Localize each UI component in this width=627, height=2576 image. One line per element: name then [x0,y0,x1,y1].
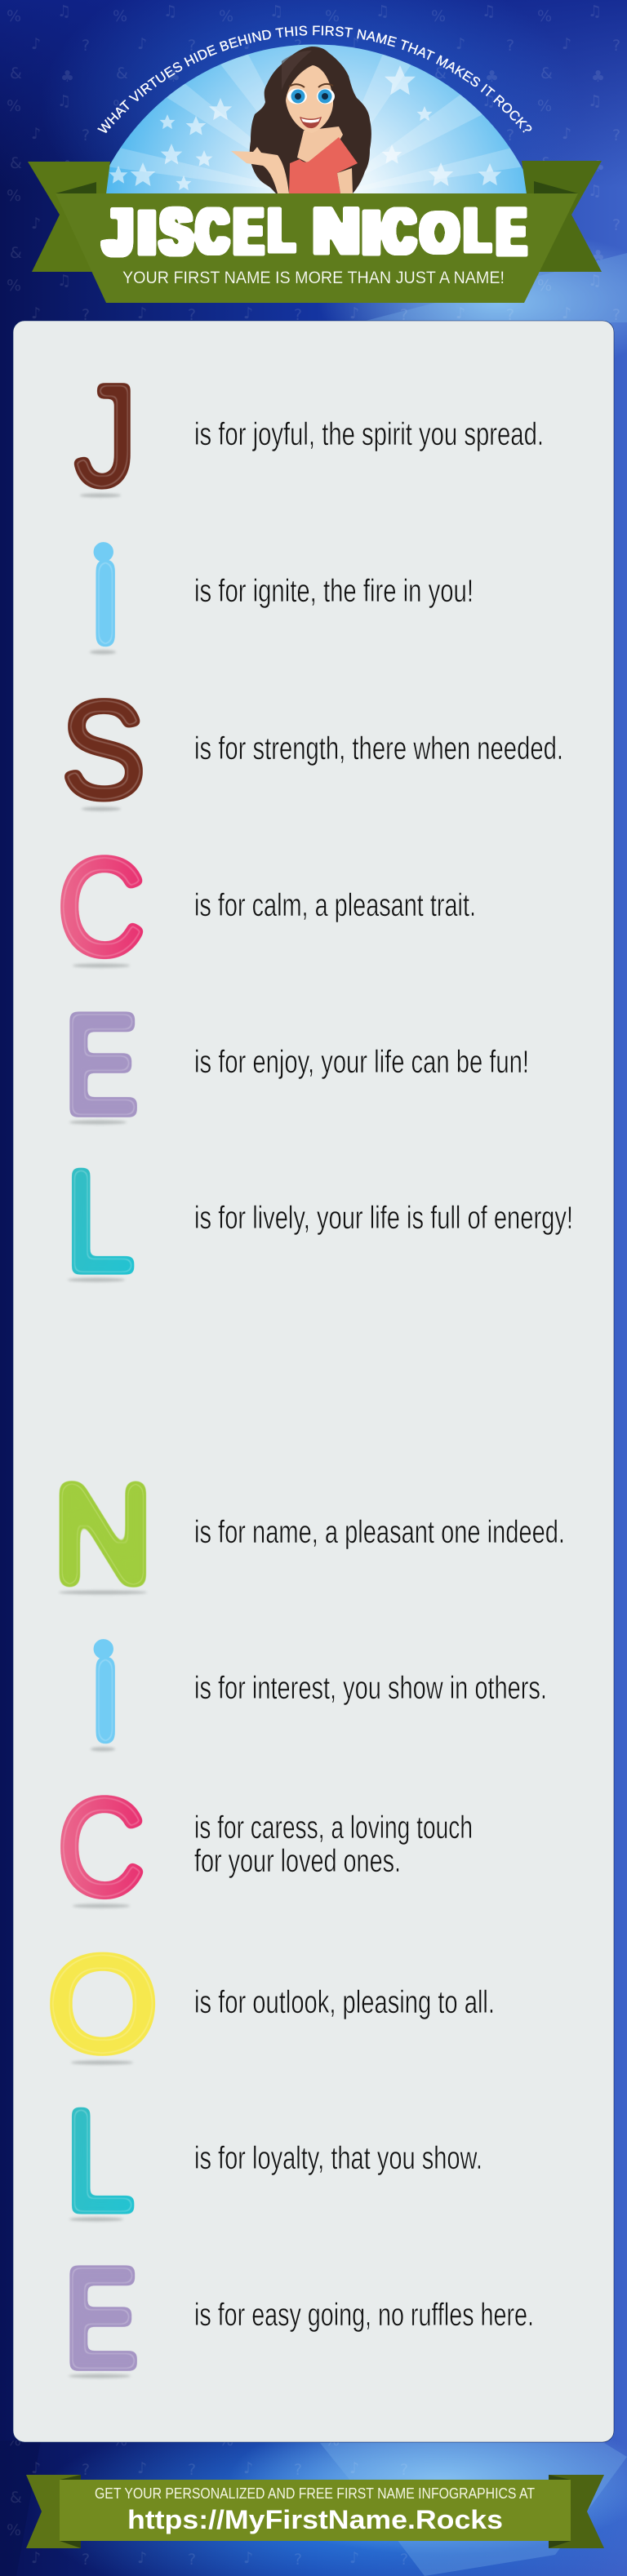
row C: C [57,1770,145,1924]
footer call to action: GET YOUR PERSONALIZED AND FREE FIRST NAME INFOGRAPHICS AT [95,2485,535,2502]
row I: ı [94,522,117,666]
row E [64,987,529,1143]
name title: J [104,196,133,269]
name title: I [362,199,381,268]
name title: E [234,195,262,269]
footer ribbon tails [26,2475,604,2548]
row S: S [60,673,146,827]
row C [57,1770,473,1924]
eyes [287,88,335,104]
name title: E [497,196,525,269]
row E: E [64,987,138,1143]
row I [90,511,474,666]
footer ribbon [26,2475,604,2548]
name title: O [421,202,458,264]
row N: N [52,1456,153,1613]
row O: O [47,1929,158,2079]
row I: • [91,511,117,593]
subtitle: YOUR FIRST NAME IS MORE THAN JUST A NAME! [122,268,505,287]
name title: L [465,196,490,265]
row C: for your loved ones. [194,1844,401,1879]
name title: N [314,195,360,267]
brows [289,84,333,87]
row J: J [73,354,138,517]
row J [73,354,544,517]
row C [57,830,476,984]
woman character [231,47,371,193]
row L: is for loyalty, that you show. [194,2141,482,2176]
header dome illustration [106,44,527,193]
name title: L [269,196,294,265]
arm and hand [231,147,289,193]
row S [60,673,563,827]
row C: C [57,830,145,984]
name title [104,194,525,269]
mouth [300,117,322,128]
row C: is for calm, a pleasant trait. [194,888,476,923]
name title: C [384,197,415,266]
row O [47,1929,495,2079]
row C: is for caress, a loving touch [194,1810,473,1845]
row L [64,1140,573,1302]
name title: I [137,199,157,268]
row I: is for ignite, the fire in you! [194,574,474,609]
red shirt [289,137,358,193]
row N [52,1456,565,1613]
row O: is for outlook, pleasing to all. [194,1985,495,2020]
panel: letters card [13,321,614,2442]
row E [64,2241,534,2396]
name title: S [161,194,192,268]
arched tagline: WHAT VIRTUES HIDE BEHIND THIS FIRST NAME THAT MAKES IT ROCK? [97,26,532,133]
row L [64,2080,482,2241]
row E: E [64,2241,138,2396]
row L: L [64,1140,136,1302]
row I: • [91,1608,117,1690]
ribbon tails [28,161,602,272]
name title: C [197,197,228,266]
ribbon front [56,193,578,303]
footer ribbon front [60,2480,571,2541]
row I: ı [94,1619,117,1763]
row I [91,1608,547,1763]
title ribbon [28,161,602,303]
dome with star burst [106,44,527,193]
row L: L [64,2080,136,2241]
footer url: https://MyFirstName.Rocks [127,2505,503,2534]
